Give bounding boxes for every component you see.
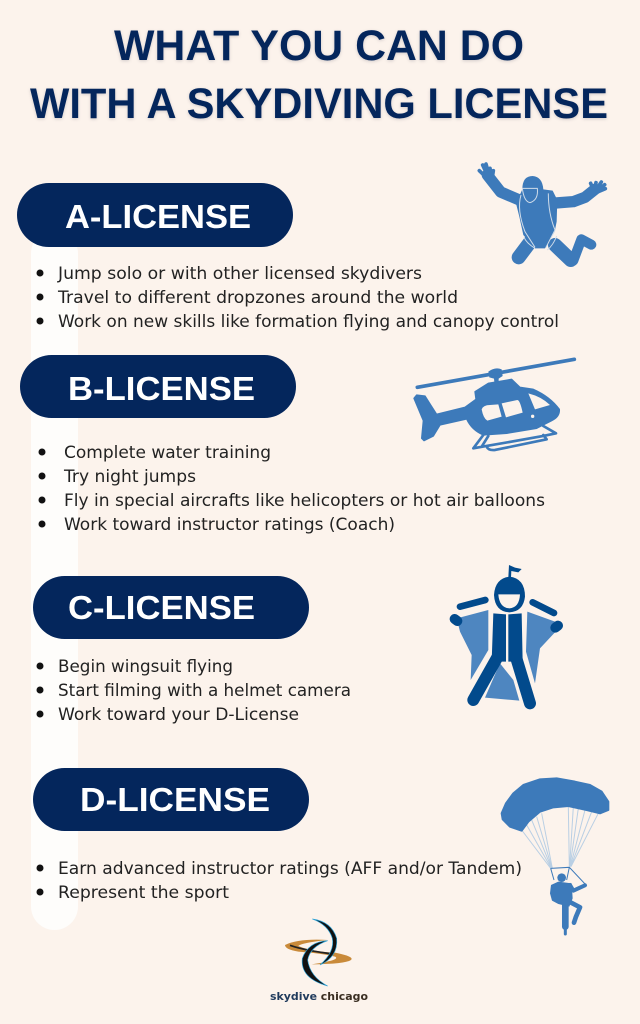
panel: C-License [33, 565, 558, 725]
heading: B-License [20, 355, 296, 418]
list: A-License abilities [36, 264, 559, 332]
icon: freefalling skydiver [479, 164, 605, 261]
heading: A-License [17, 183, 293, 247]
list: B-License abilities: Fly in special aircrafts like helicopters or hot air balloons [64, 491, 545, 511]
list: B-License abilities: Work toward instructor ratings (Coach) [64, 515, 395, 535]
title: WHAT YOU CAN DO [114, 22, 524, 70]
heading: B-License: B-LICENSE [68, 371, 255, 408]
logo wordmark: skydive chicago [270, 990, 368, 1003]
heading: C-License: C-LICENSE [68, 590, 255, 627]
list: B-License abilities [38, 443, 545, 535]
list: D-License abilities: Represent the sport [58, 883, 229, 903]
list: D-License abilities [36, 859, 522, 903]
list: A-License abilities: Jump solo or with other licensed skydivers [57, 264, 422, 284]
list: B-License abilities: Complete water training [64, 443, 271, 463]
list: C-License abilities: Begin wingsuit flying [58, 657, 233, 677]
heading: D-License [33, 768, 309, 831]
heading: C-License [33, 576, 309, 639]
list: A-License abilities: Travel to different dropzones around the world [57, 288, 458, 308]
panel: D-License [33, 768, 608, 934]
list: C-License abilities: Start filming with a helmet camera [58, 681, 351, 701]
list: C-License abilities [36, 657, 351, 725]
list: A-License abilities: Work on new skills like formation flying and canopy control [58, 312, 559, 332]
icon: wingsuit flyer [455, 565, 558, 703]
list: D-License abilities: Earn advanced instructor ratings (AFF and/or Tandem) [58, 859, 522, 879]
list: B-License abilities: Try night jumps [63, 467, 196, 487]
logo: Skydive Chicago [270, 919, 368, 1003]
list: C-License abilities: Work toward your D-License [58, 705, 299, 725]
logo mark [285, 919, 352, 986]
heading: D-License: D-LICENSE [80, 782, 270, 819]
panel: B-License [20, 355, 574, 535]
heading: A-License: A-LICENSE [65, 199, 251, 236]
title [30, 22, 608, 128]
title: WITH A SKYDIVING LICENSE [30, 80, 608, 128]
panel: A-License [17, 164, 605, 332]
icon: helicopter [414, 359, 574, 450]
icon: parachutist under canopy [502, 778, 608, 934]
